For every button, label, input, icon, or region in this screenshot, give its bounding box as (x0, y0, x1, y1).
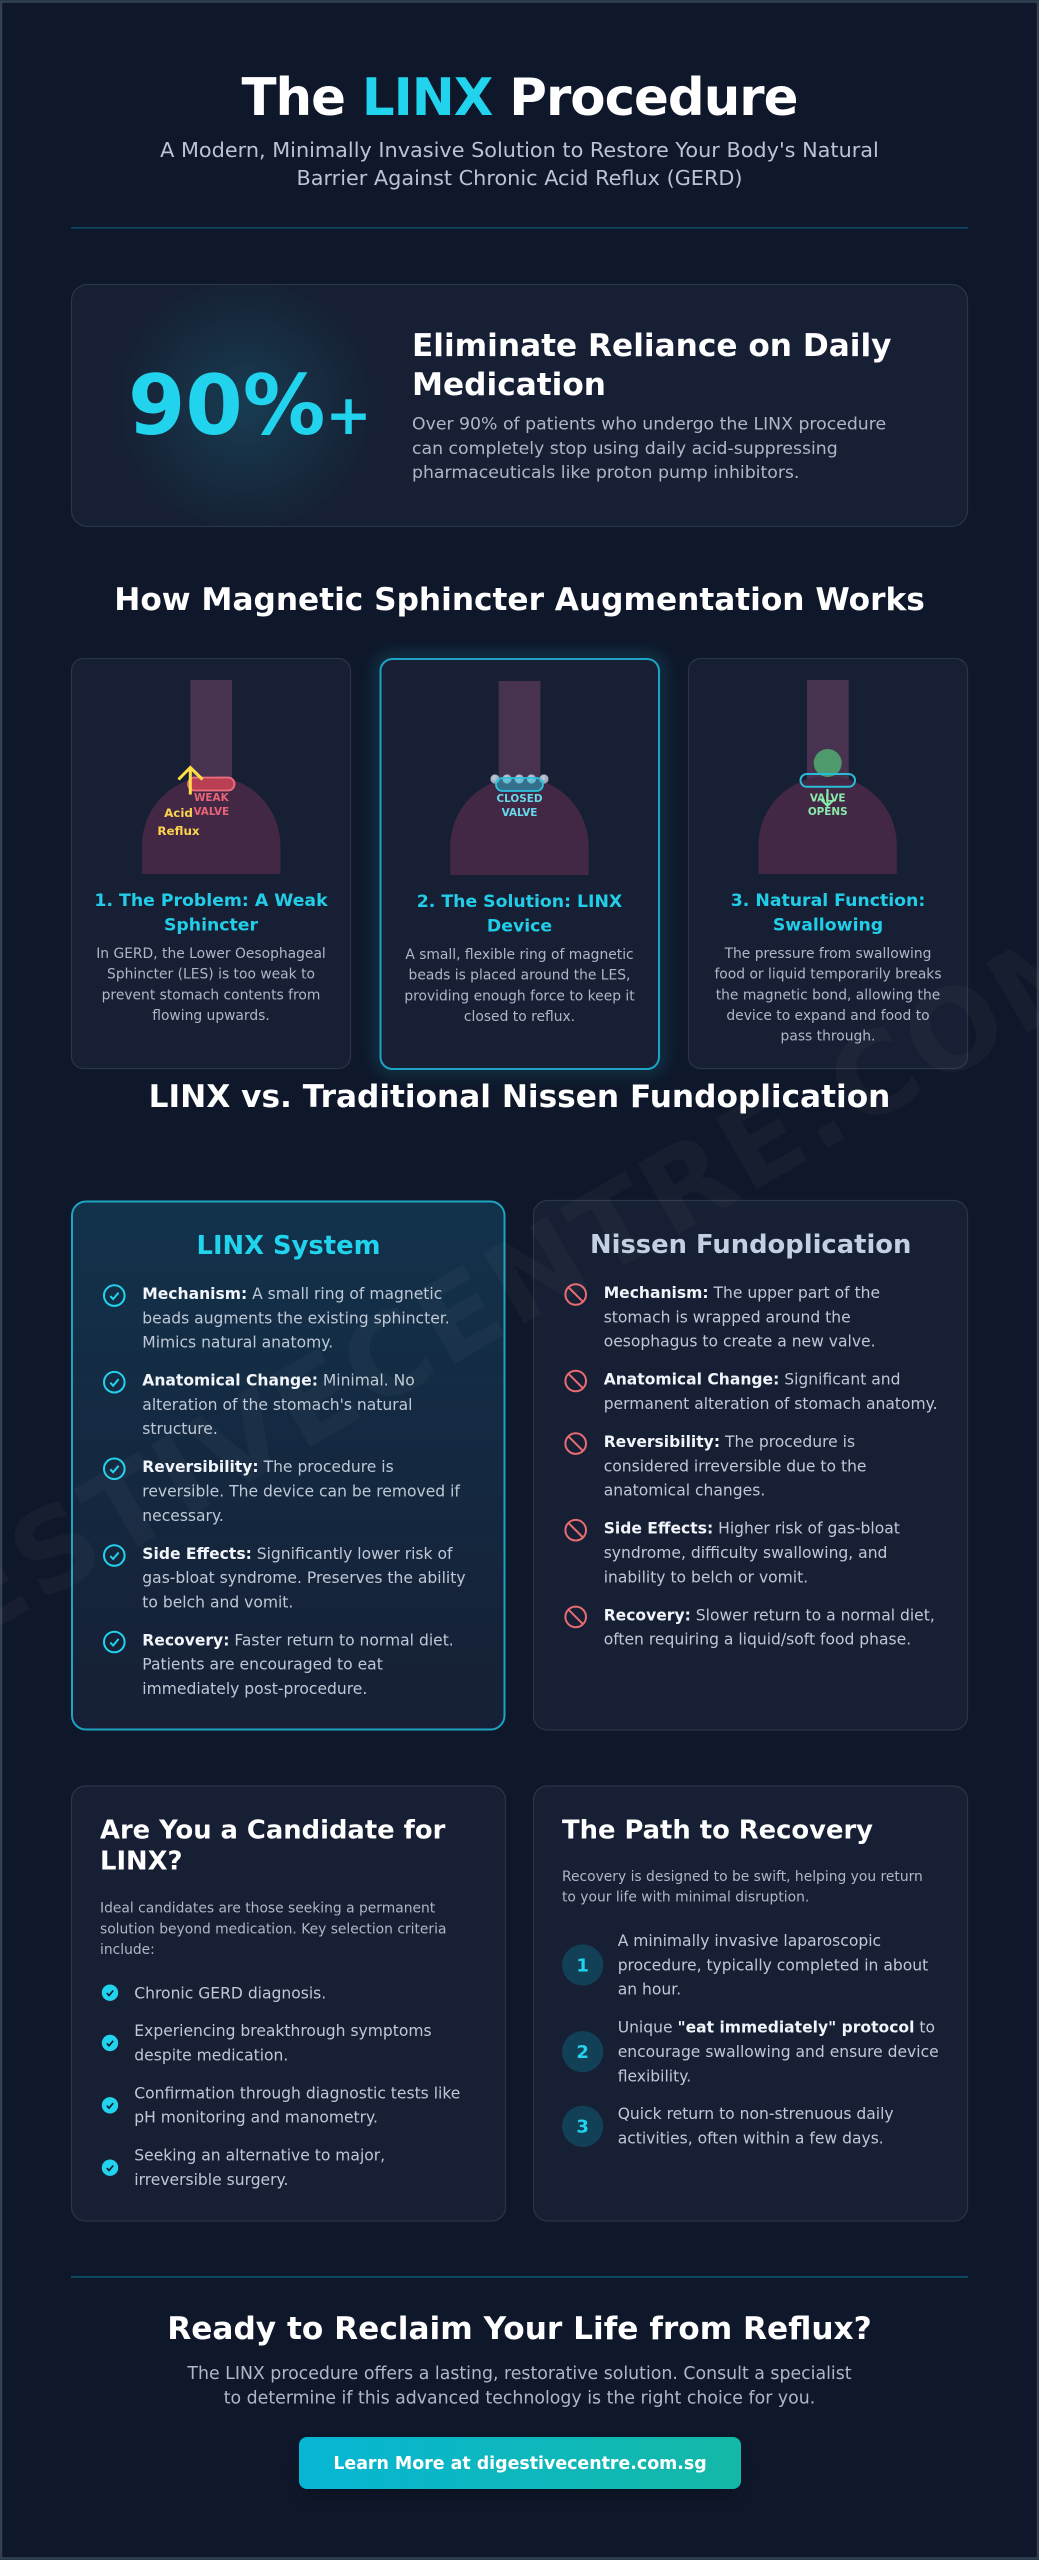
item: anatomical change: alteration of the stomach's natural (142, 1396, 413, 1414)
hero description: pharmaceuticals like proton pump inhibitors. (412, 463, 799, 483)
step text: A small, flexible ring of magnetic (405, 947, 634, 963)
item: side effects: gas-bloat syndrome. Preserves the ability (142, 1569, 466, 1587)
item: side effects: syndrome, difficulty swallowing, and (604, 1544, 887, 1562)
step text: providing enough force to keep it (404, 988, 635, 1004)
panel: step 3 (688, 658, 968, 1068)
criterion 4: irreversible surgery. (134, 2171, 288, 2189)
item: side effects: inability to belch or vomit. (604, 1568, 808, 1586)
item: anatomical change: Minimal. No (323, 1372, 415, 1390)
panel: recovery path (534, 1786, 968, 2221)
step text: flowing upwards. (152, 1008, 270, 1024)
item: reversibility (565, 1433, 867, 1500)
recovery step 2: "eat immediately" protocol to (677, 2019, 935, 2037)
step title: Sphincter (164, 915, 259, 935)
intro text: Ideal candidates are those seeking a permanent (100, 1901, 436, 1917)
item: anatomical change: Anatomical Change: (142, 1372, 318, 1390)
item: side effects: Significantly lower risk of (257, 1545, 452, 1563)
panel heading: Are You a Candidate for (100, 1815, 446, 1845)
item: mechanism: beads augments the existing sphincter. (142, 1309, 450, 1327)
criterion 3: pH monitoring and manometry. (134, 2109, 378, 2127)
CTA heading: Ready to Reclaim Your Life from Reflux? (167, 2311, 872, 2347)
panel: Nissen fundoplication (534, 1200, 968, 1730)
item: reversibility: reversible. The device can be removed if (142, 1482, 460, 1500)
intro text: include: (100, 1942, 155, 1958)
diagram: swallowing: VALVE (810, 792, 846, 804)
step title: 1. The Problem: A Weak (94, 891, 328, 911)
step title: 2. The Solution: LINX (417, 892, 622, 912)
item: mechanism: stomach is wrapped around the (604, 1308, 851, 1326)
recovery step 2: flexibility. (618, 2067, 691, 2085)
panel heading: LINX System (197, 1231, 380, 1261)
item: reversibility: Reversibility: (142, 1458, 259, 1476)
item: recovery: Slower return to a normal diet, (696, 1606, 935, 1624)
diagram: weak sphincter (142, 680, 280, 874)
recovery step 3: activities, often within a few days. (618, 2129, 884, 2147)
item: recovery: often requiring a liquid/soft food phase. (604, 1631, 911, 1649)
diagram: LINX device: VALVE (502, 807, 537, 819)
criterion 3 (102, 2084, 460, 2127)
item: recovery: Recovery: (142, 1631, 229, 1649)
item: mechanism: Mechanism: (142, 1285, 247, 1303)
recovery step 2 (562, 2019, 939, 2085)
item: anatomical change (565, 1371, 938, 1413)
CTA button (299, 2437, 741, 2494)
CTA text: to determine if this advanced technology is the right choice for you. (224, 2388, 815, 2408)
item: mechanism (565, 1284, 880, 1351)
hero description: Over 90% of patients who undergo the LINX procedure (412, 414, 886, 434)
criterion 4 (102, 2147, 385, 2189)
step title: Swallowing (773, 915, 883, 935)
step text: The pressure from swallowing (724, 946, 931, 962)
item: anatomical change (104, 1372, 415, 1438)
item: reversibility: anatomical changes. (604, 1482, 765, 1500)
criterion 2: Experiencing breakthrough symptoms (134, 2022, 432, 2040)
intro text: Recovery is designed to be swift, helping you return (562, 1869, 923, 1885)
recovery step 1 (562, 1932, 928, 1999)
diagram: LINX device (450, 681, 589, 875)
step title: Device (487, 916, 552, 936)
diagram: weak sphincter: VALVE (193, 806, 229, 818)
item: side effects: to belch and vomit. (142, 1593, 293, 1611)
item: mechanism: oesophagus to create a new valve. (604, 1333, 876, 1351)
recovery step 2: Unique (618, 2019, 677, 2037)
hero heading: Medication (412, 367, 606, 403)
item: mechanism: The upper part of the (713, 1284, 880, 1302)
recovery step 2: 2 (576, 2042, 589, 2063)
recovery step 2: encourage swallowing and ensure device (618, 2043, 939, 2061)
hero heading: Eliminate Reliance on Daily (412, 328, 891, 364)
diagram: weak sphincter: Reflux (157, 824, 200, 838)
panel heading: Nissen Fundoplication (590, 1230, 911, 1260)
diagram: weak sphincter: Acid (164, 806, 193, 820)
call to action (167, 2311, 872, 2494)
heading: how it works: How Magnetic Sphincter Augmentation Works (114, 582, 925, 618)
item: reversibility: The procedure is (725, 1433, 855, 1451)
panel: LINX system (72, 1202, 504, 1730)
recovery step 1: 1 (576, 1955, 589, 1976)
item: recovery: Recovery: (604, 1606, 691, 1624)
item: side effects: Side Effects: (142, 1545, 252, 1563)
panel: step 2 (380, 658, 660, 1069)
step text: device to expand and food to (726, 1008, 930, 1024)
item: reversibility (104, 1458, 460, 1525)
subtitle: A Modern, Minimally Invasive Solution to Restore Your Body's Natural (160, 138, 879, 162)
item: reversibility: considered irreversible due to the (604, 1457, 867, 1475)
step text: closed to reflux. (464, 1009, 575, 1025)
step text: Sphincter (LES) is too weak to (107, 967, 315, 983)
panel: hero statistic (72, 284, 968, 526)
recovery step 1: A minimally invasive laparoscopic (618, 1932, 881, 1950)
step text: prevent stomach contents from (102, 987, 320, 1003)
item: anatomical change: Significant and (784, 1371, 900, 1389)
step text: pass through. (781, 1029, 875, 1045)
diagram: weak sphincter: WEAK (194, 792, 230, 804)
item: reversibility: The procedure is (264, 1458, 394, 1476)
intro text: to your life with minimal disruption. (562, 1890, 809, 1906)
item: mechanism: Mechanism: (604, 1284, 709, 1302)
panel: candidate (72, 1786, 506, 2221)
step text: food or liquid temporarily breaks (714, 967, 942, 983)
item: mechanism: A small ring of magnetic (252, 1285, 442, 1303)
step title: 3. Natural Function: (731, 891, 925, 911)
item: mechanism (104, 1285, 450, 1352)
panel heading: LINX? (100, 1846, 182, 1876)
item: anatomical change: Anatomical Change: (604, 1371, 779, 1389)
subtitle: Barrier Against Chronic Acid Reflux (GERD) (296, 166, 743, 190)
panel: step 1 (72, 658, 350, 1068)
step text: In GERD, the Lower Oesophageal (96, 946, 326, 962)
title: The LINX Procedure (242, 68, 798, 128)
CTA button: Learn More at digestivecentre.com.sg (333, 2454, 707, 2474)
criterion 2: despite medication. (134, 2046, 288, 2064)
heading: comparison: LINX vs. Traditional Nissen Fundoplication (149, 1079, 890, 1115)
item: recovery: Patients are encouraged to eat (142, 1656, 383, 1674)
CTA text: The LINX procedure offers a lasting, restorative solution. Consult a specialist (186, 2364, 852, 2384)
item: side effects (565, 1520, 900, 1586)
item: side effects (104, 1545, 466, 1611)
item: recovery: immediately post-procedure. (142, 1680, 367, 1698)
item: reversibility: Reversibility: (604, 1433, 720, 1451)
item: anatomical change: structure. (142, 1420, 218, 1438)
recovery step 3: 3 (576, 2117, 589, 2138)
step text: the magnetic bond, allowing the (716, 987, 940, 1003)
diagram: swallowing: OPENS (808, 806, 848, 818)
criterion 4: Seeking an alternative to major, (134, 2147, 385, 2165)
step text: beads is placed around the LES, (409, 968, 630, 984)
header (160, 68, 879, 190)
big number: 90%+ (128, 358, 372, 454)
item: recovery: Faster return to normal diet. (234, 1631, 454, 1649)
item: recovery (104, 1631, 454, 1698)
hero description: can completely stop using daily acid-suppressing (412, 439, 838, 459)
criterion 3: Confirmation through diagnostic tests like (134, 2084, 460, 2102)
recovery step 1: procedure, typically completed in about (618, 1956, 928, 1974)
item: anatomical change: permanent alteration of stomach anatomy. (604, 1395, 938, 1413)
item: recovery (565, 1606, 935, 1649)
criterion 2 (102, 2022, 432, 2064)
diagram: LINX device: CLOSED (497, 793, 543, 805)
item: side effects: Higher risk of gas-bloat (718, 1520, 900, 1538)
intro text: solution beyond medication. Key selection criteria (100, 1921, 446, 1937)
criterion 1: Chronic GERD diagnosis. (134, 1984, 326, 2002)
item: side effects: Side Effects: (604, 1520, 713, 1538)
diagram: swallowing (758, 680, 897, 874)
item: reversibility: necessary. (142, 1507, 224, 1525)
item: mechanism: Mimics natural anatomy. (142, 1334, 333, 1352)
recovery step 3 (562, 2105, 894, 2147)
panel heading: The Path to Recovery (562, 1815, 873, 1845)
recovery step 3: Quick return to non-strenuous daily (618, 2105, 894, 2123)
recovery step 1: an hour. (618, 1981, 681, 1999)
